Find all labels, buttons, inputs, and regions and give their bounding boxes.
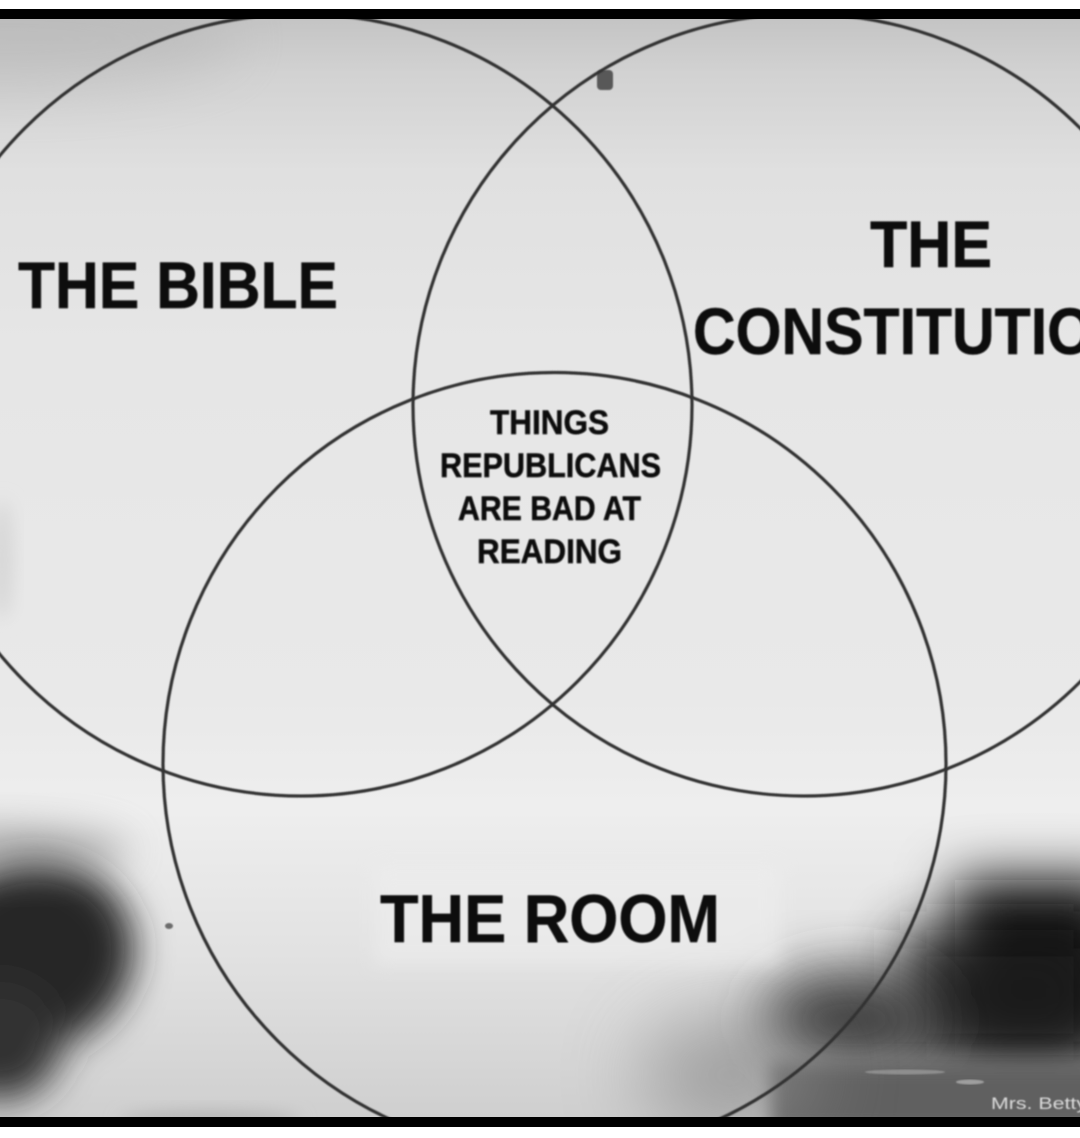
left edge smudge bbox=[0, 500, 12, 620]
circle: the bible bbox=[0, 14, 692, 796]
label: center intersection: REPUBLICANS bbox=[440, 447, 661, 485]
circle: the room bbox=[163, 372, 946, 1138]
label: center intersection bbox=[440, 404, 661, 571]
bottom black border bbox=[0, 1117, 1080, 1127]
credit watermark: Mrs. Betty bbox=[991, 1094, 1080, 1113]
shading inside lower circle bbox=[640, 1015, 820, 1135]
top black border bbox=[0, 9, 1080, 19]
speck at top bbox=[597, 70, 613, 90]
label: the bible: THE BIBLE bbox=[18, 248, 338, 322]
pale patch behind THE ROOM bbox=[662, 934, 781, 968]
label: the room: THE ROOM bbox=[380, 881, 720, 957]
label: the constitution: THE bbox=[870, 207, 992, 281]
label: center intersection: THINGS bbox=[490, 404, 609, 442]
label: center intersection: READING bbox=[477, 533, 622, 571]
label: center intersection: ARE BAD AT bbox=[458, 490, 641, 528]
ground at lower right bbox=[760, 1056, 1080, 1117]
label: the constitution bbox=[694, 220, 1080, 356]
lower left dark blotch bbox=[0, 832, 159, 1100]
speck at lower left bbox=[165, 923, 173, 929]
lower right dark blotch bbox=[955, 880, 1080, 1055]
top left vignette bbox=[0, 20, 198, 92]
circle: the constitution bbox=[413, 14, 1080, 796]
